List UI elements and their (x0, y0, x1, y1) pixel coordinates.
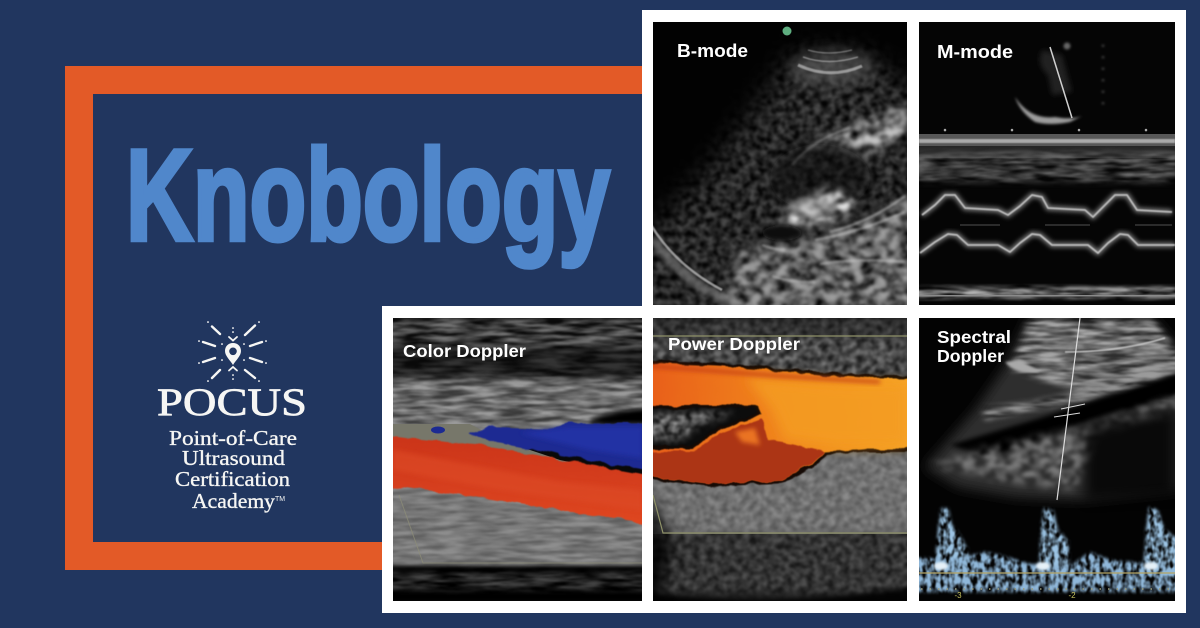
top bands (919, 134, 1175, 146)
diaphragm arc (651, 225, 722, 290)
white backing panel (382, 10, 1186, 613)
M-line (1050, 47, 1072, 118)
time axis: -3 (954, 591, 962, 600)
kidney cortex (770, 144, 870, 212)
baseline (919, 572, 1175, 574)
dark calyx (762, 225, 802, 241)
panel: Spectral Doppler (915, 318, 1180, 601)
label: B-mode (677, 41, 748, 61)
upper dark-orange edge (650, 366, 880, 382)
panel: Power Doppler (653, 318, 907, 601)
color box (653, 336, 907, 533)
wall motion lower (920, 234, 1175, 253)
tissue top (385, 318, 650, 348)
label: M-mode (937, 42, 1013, 62)
label: Power Doppler (668, 334, 800, 354)
orange frame (65, 66, 642, 570)
logo wordmark: POCUS (157, 381, 307, 424)
near-field haze (790, 50, 874, 86)
tissue top (645, 318, 915, 336)
time axis (921, 589, 1175, 600)
logo tagline: Ultrasound (182, 446, 286, 470)
logo tagline: Point-of-Care (169, 426, 297, 450)
lower liver (930, 395, 1180, 490)
label: Color Doppler (403, 341, 526, 361)
vessel dark (950, 372, 1180, 458)
blood-tissue gap (393, 424, 570, 462)
red artery (385, 436, 650, 525)
panel: B-mode (653, 22, 907, 305)
lower bright tissue (715, 196, 907, 305)
spectral waveform (915, 507, 1180, 592)
panel: Color Doppler (385, 318, 650, 601)
icon: map pin with rays (199, 322, 266, 381)
logo tagline: Academy (192, 489, 276, 513)
logo tagline: TM (275, 496, 285, 503)
renal sinus (778, 188, 856, 228)
mini heart view (1015, 42, 1103, 124)
capsule bright band (805, 102, 907, 162)
label: Spectral (937, 327, 1011, 347)
logo: POCUS (157, 322, 307, 513)
logo tagline (169, 426, 297, 513)
blue vein (468, 423, 650, 470)
title: Knobology (126, 122, 610, 268)
tissue bottom (645, 450, 915, 534)
near-field rings (798, 50, 862, 73)
label (937, 327, 1011, 366)
wall motion upper (922, 195, 1172, 217)
color box (399, 495, 642, 563)
time axis: -2 (1068, 591, 1076, 600)
label: Doppler (937, 346, 1004, 366)
Doppler line and gate (1054, 318, 1085, 500)
logo tagline: Certification (175, 467, 291, 491)
2D sector (925, 318, 1180, 500)
dark red branch (650, 418, 826, 484)
tissue bottom (393, 486, 642, 568)
bottom band (915, 287, 1179, 298)
orange flow (645, 362, 915, 485)
time ticks (945, 129, 1146, 131)
panel: M-mode (915, 22, 1179, 305)
plaque branch tissue (653, 407, 757, 446)
green marker (782, 26, 792, 36)
ultrasound sector tissue (653, 40, 907, 305)
